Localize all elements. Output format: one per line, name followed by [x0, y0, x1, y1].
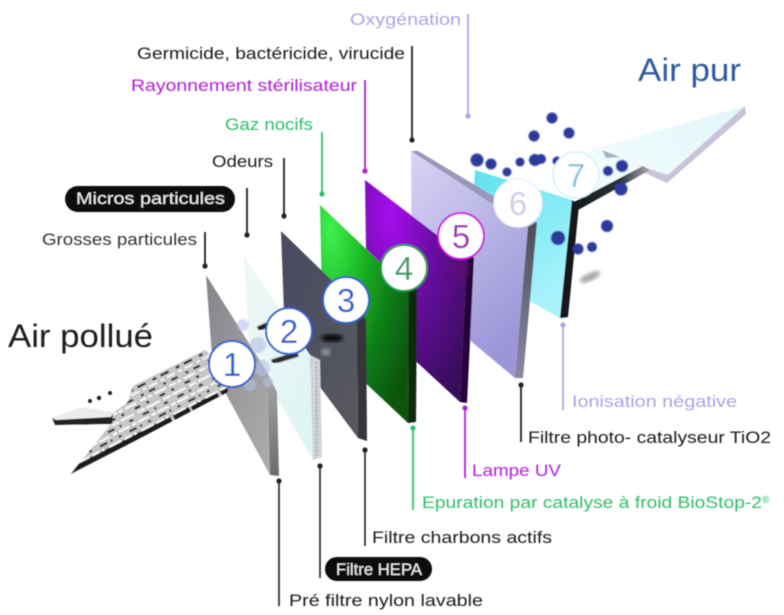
- badge 5: 5: [452, 218, 470, 255]
- arrow: air pollué: [40, 319, 298, 480]
- badge 7: 7: [567, 157, 585, 194]
- label: Filtre charbons actifs: Filtre charbons actifs: [372, 528, 552, 547]
- air particles: [470, 112, 628, 254]
- badge 2: [266, 308, 312, 354]
- filter panel 6: [411, 151, 537, 378]
- badge 6: 6: [509, 185, 527, 222]
- label: Gaz nocifs: Gaz nocifs: [225, 115, 313, 134]
- label: Micros particules: Micros particules: [76, 189, 225, 208]
- label: Odeurs: Odeurs: [212, 152, 273, 171]
- badge 6: [494, 179, 542, 227]
- badge 1: [209, 341, 255, 387]
- label: Rayonnement stérilisateur: Rayonnement stérilisateur: [131, 76, 357, 95]
- filter panel 1: [206, 275, 279, 476]
- filter panel 5: [365, 180, 474, 403]
- badge 3: [323, 277, 369, 323]
- label: Filtre HEPA: [325, 557, 432, 581]
- label: Germicide: Germicide, bactéricide, virucide: [137, 44, 405, 63]
- badge 1: 1: [223, 346, 241, 383]
- filter panel 4: [320, 205, 417, 423]
- label: Epuration: Epuration par catalyse à froid BioStop-2: [422, 493, 762, 512]
- label: Lampe UV: Lampe UV: [472, 461, 562, 480]
- arrow: air pur: [574, 106, 746, 210]
- filter panel 2: [243, 254, 322, 460]
- badge 2: 2: [280, 313, 298, 350]
- filter panel 3: [281, 231, 367, 441]
- badge 4: 4: [395, 250, 413, 287]
- badge 5: [438, 213, 484, 259]
- heading: Air pur: Air pur: [638, 52, 741, 88]
- label: Pré filtre nylon lavable: Pré filtre nylon lavable: [289, 591, 483, 610]
- label: Micros particules: [65, 186, 235, 212]
- badge 3: 3: [337, 282, 355, 319]
- label: Filtre HEPA: Filtre HEPA: [336, 560, 423, 579]
- badge 4: [381, 245, 427, 291]
- label: Ionisation négative: Ionisation négative: [572, 392, 737, 411]
- label: Oxygénation: Oxygénation: [350, 10, 461, 29]
- particle shadow: [578, 269, 602, 285]
- heading: Air pollué: Air pollué: [8, 318, 153, 354]
- label: Filtre photo-catalyseur: Filtre photo- catalyseur TiO2: [528, 428, 771, 447]
- badge 7: [553, 152, 599, 198]
- label: Grosses particules: Grosses particules: [42, 230, 197, 249]
- filter panel 7: [470, 170, 579, 318]
- leader lines: [202, 14, 566, 606]
- label: Epuration: ®: [762, 495, 770, 506]
